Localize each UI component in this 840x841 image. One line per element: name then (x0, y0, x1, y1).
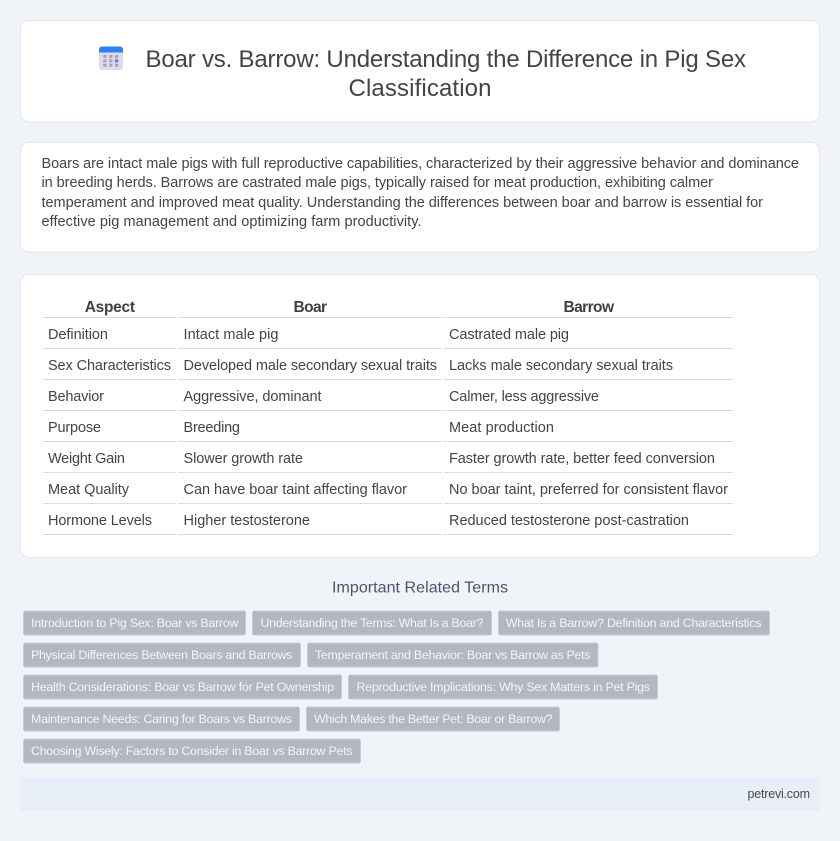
row: definition (48, 327, 569, 343)
tag list (24, 611, 770, 763)
row: sex characteristics: Sex Characteristics (48, 358, 171, 374)
tag (252, 611, 492, 635)
row: sex characteristics (48, 358, 673, 374)
tag (24, 611, 246, 635)
table header: Barrow (564, 299, 615, 316)
row: weight gain: Weight Gain (48, 451, 125, 467)
row: behavior: Behavior (48, 389, 104, 405)
table header: Boar (294, 299, 327, 316)
row: definition: Definition (48, 327, 108, 343)
table header (85, 299, 615, 316)
row: hormone levels (48, 513, 689, 529)
title (146, 46, 746, 102)
tag: Health Considerations: Boar vs Barrow for Pet Ownership (31, 680, 334, 694)
panel: comparison table (20, 274, 820, 558)
footer: petrevi.com (748, 787, 810, 801)
tag (348, 675, 658, 699)
tag (24, 739, 360, 763)
tag (24, 643, 300, 667)
row: purpose: Breeding (184, 420, 240, 436)
row: weight gain: Faster growth rate, better feed conversion (449, 451, 715, 467)
row: behavior: Aggressive, dominant (184, 389, 322, 405)
text block: introduction (42, 156, 799, 230)
heading: related terms: Important Related Terms (332, 580, 508, 596)
row: weight gain: Slower growth rate (184, 451, 303, 467)
row: sex characteristics: Lacks male secondary sexual traits (449, 358, 673, 374)
tag (498, 611, 770, 635)
text block: introduction: temperament and improved meat quality. Understanding the differences between boar and barrow is essential for (42, 195, 763, 211)
icon: calendar (99, 46, 123, 70)
row: hormone levels: Hormone Levels (48, 513, 152, 529)
tag (306, 707, 560, 731)
text block: introduction: in breeding herds. Barrows are castrated male pigs, typically raised for meat production, exhibiting calmer (42, 175, 713, 191)
tag: Temperament and Behavior: Boar vs Barrow as Pets (315, 648, 590, 662)
tag: Choosing Wisely: Factors to Consider in Boar vs Barrow Pets (31, 744, 352, 758)
panel: header (20, 20, 820, 122)
row: hormone levels: Higher testosterone (184, 513, 310, 529)
tag (24, 675, 342, 699)
footer (20, 777, 820, 811)
row: definition: Intact male pig (184, 327, 278, 343)
row: weight gain (48, 451, 715, 467)
text block: introduction: Boars are intact male pigs with full reproductive capabilities, characterized by their aggressive behavior and dominance (42, 156, 799, 172)
table header: Aspect (85, 299, 135, 316)
tag: Reproductive Implications: Why Sex Matters in Pet Pigs (356, 680, 650, 694)
row: purpose: Purpose (48, 420, 101, 436)
row: meat quality: No boar taint, preferred for consistent flavor (449, 482, 728, 498)
tag: Which Makes the Better Pet: Boar or Barrow? (314, 712, 553, 726)
row: definition: Castrated male pig (449, 327, 569, 343)
row: hormone levels: Reduced testosterone post-castration (449, 513, 689, 529)
tag: Understanding the Terms: What Is a Boar? (260, 616, 484, 630)
panel: introduction (20, 142, 820, 252)
row: behavior (48, 389, 599, 405)
row: meat quality: Can have boar taint affecting flavor (184, 482, 407, 498)
tag: What Is a Barrow? Definition and Characteristics (506, 616, 762, 630)
tag: Maintenance Needs: Caring for Boars vs Barrows (31, 712, 292, 726)
row: sex characteristics: Developed male secondary sexual traits (184, 358, 437, 374)
row: behavior: Calmer, less aggressive (449, 389, 599, 405)
row: meat quality (48, 482, 728, 498)
row: purpose (48, 420, 554, 436)
title: Boar vs. Barrow: Understanding the Difference in Pig Sex (146, 46, 746, 73)
tag: Physical Differences Between Boars and Barrows (31, 648, 292, 662)
tag (308, 643, 598, 667)
tag (24, 707, 300, 731)
row: purpose: Meat production (449, 420, 554, 436)
tag: Introduction to Pig Sex: Boar vs Barrow (31, 616, 239, 630)
text block: introduction: effective pig management and optimizing farm productivity. (42, 214, 422, 230)
row: meat quality: Meat Quality (48, 482, 130, 498)
title: Classification (348, 75, 492, 102)
